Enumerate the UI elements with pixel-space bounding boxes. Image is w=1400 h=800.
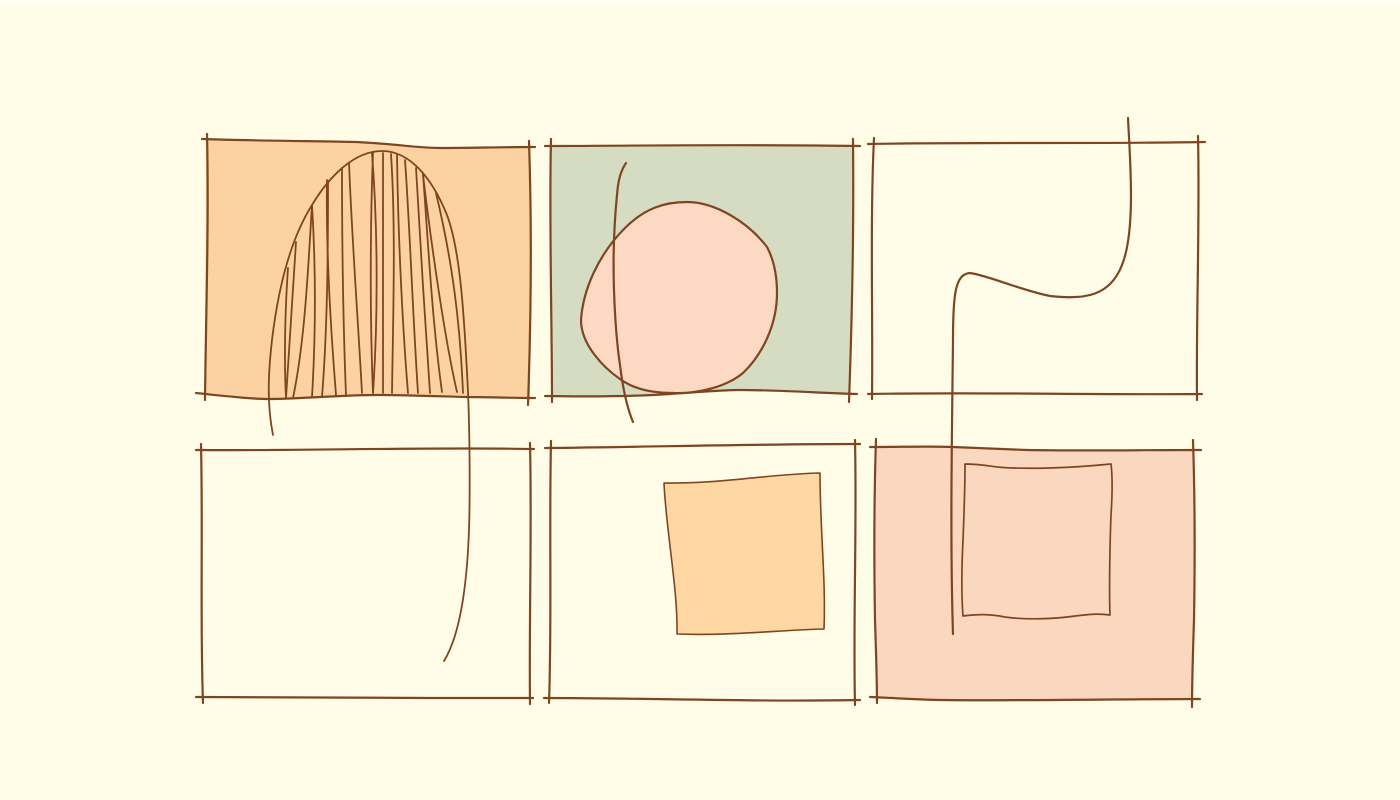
panel: top-right empty with curve: [868, 136, 1205, 400]
long connecting curve: [951, 118, 1131, 634]
panel: bottom-middle with orange square: [544, 440, 860, 705]
arch shape with vertical hatching: [269, 151, 470, 661]
inner square: [962, 464, 1112, 619]
panel: bottom-left empty: [196, 443, 534, 704]
panel: bottom-right pink with square: [870, 439, 1201, 707]
arch outline: [269, 151, 470, 661]
orange square: [664, 473, 824, 634]
circle blob: [581, 202, 777, 393]
vertical line: [614, 163, 633, 422]
panel: top-left orange with arch: [196, 134, 535, 661]
panel: top-middle green with circle: [545, 139, 860, 422]
